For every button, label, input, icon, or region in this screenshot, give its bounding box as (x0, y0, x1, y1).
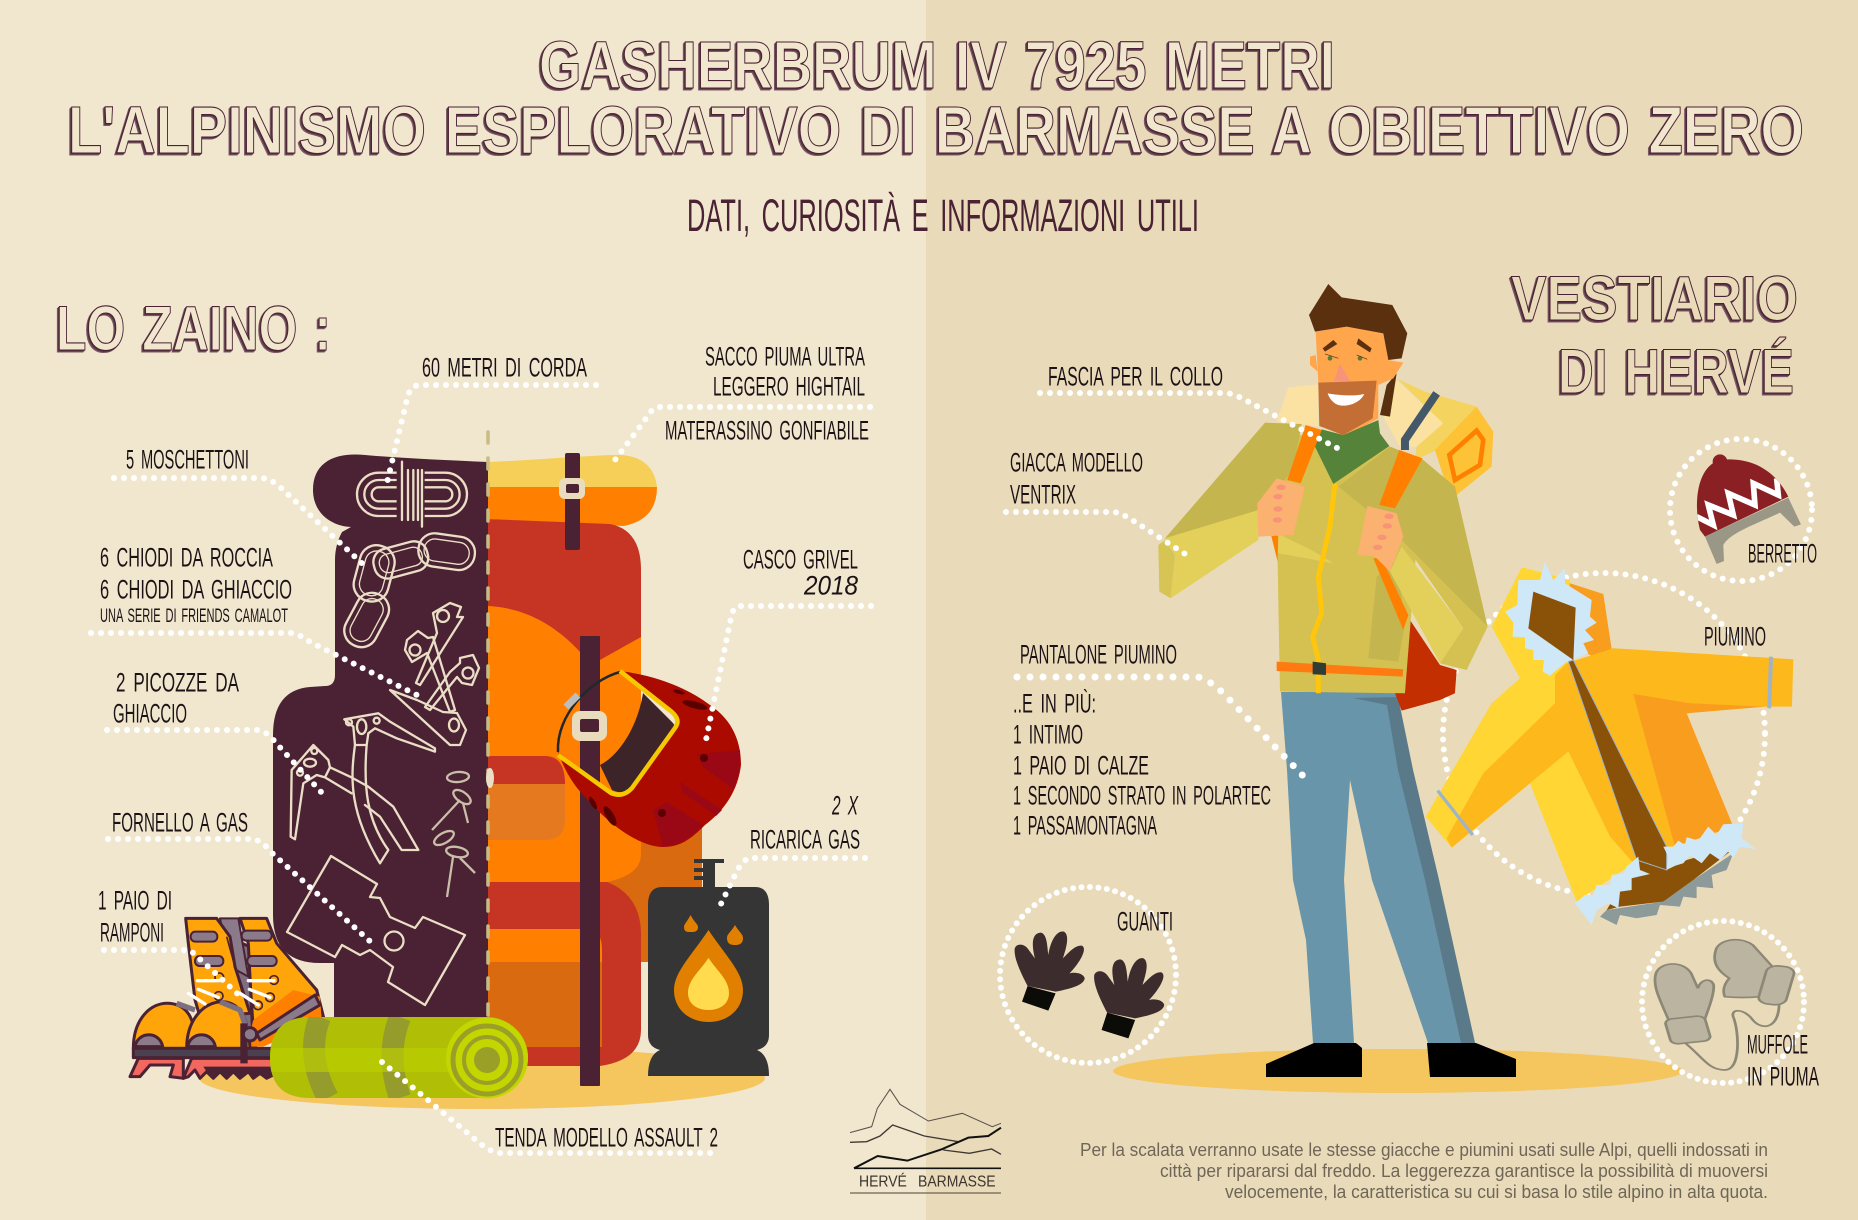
logo: hervé barmasse: HERVÉ BARMASSE (859, 1174, 996, 1191)
label: piumino: PIUMINO (1704, 622, 1766, 652)
callout: sacco piuma (615, 342, 870, 460)
waist belt (1277, 662, 1403, 677)
callout: moschettoni: 5 MOSCHETTONI (126, 444, 249, 474)
ground shadow left (199, 1047, 765, 1109)
heading: vestiario di hervé (1511, 264, 1798, 407)
icon: rope (357, 462, 467, 527)
callout: fornello (108, 808, 373, 944)
callout: chiodi: 6 CHIODI DA GHIACCIO (100, 574, 292, 604)
text block: footnote: città per ripararsi dal freddo. La leggerezza garantisce la possibilità di muoversi (1160, 1161, 1768, 1181)
callout: giacca (1006, 448, 1190, 557)
title: GASHERBRUM IV 7925 METRI (539, 28, 1335, 103)
icon: gloves (1015, 932, 1164, 1038)
head (1309, 284, 1407, 436)
callout: tenda: TENDA MODELLO ASSAULT 2 (495, 1122, 718, 1152)
callout: ramponi (98, 886, 240, 996)
stitching (486, 432, 490, 1017)
icon: ice screws (432, 771, 475, 897)
callout: chiodi: UNA SERIE DI FRIENDS CAMALOT (100, 606, 288, 627)
boot toe caps (133, 1002, 250, 1048)
callout: tenda (382, 1062, 718, 1153)
icon: mittens (1655, 940, 1796, 1070)
callout: picozze: 2 PICOZZE DA (116, 668, 239, 698)
icon: rock pitons (390, 603, 479, 745)
ground shadow right (1113, 1049, 1683, 1093)
text block: e in più: 1 PASSAMONTAGNA (1013, 810, 1157, 840)
figure: hervé (1158, 284, 1516, 1077)
label: materassino: MATERASSINO GONFIABILE (665, 416, 869, 446)
shoes (1266, 1043, 1516, 1077)
hands (1257, 478, 1403, 572)
text block: e in più (1013, 688, 1271, 840)
callout: ramponi: RAMPONI (100, 918, 164, 948)
text block: footnote: Per la scalata verranno usate le stesse giacche e piumini usati sulle Alpi, quelli indossati in (1080, 1140, 1768, 1160)
dotted circle: muffole (1642, 921, 1804, 1083)
callout: ricarica gas (719, 790, 865, 908)
callout: casco: 2018 (803, 570, 858, 600)
callout: 60 metri di corda: 60 METRI DI CORDA (422, 352, 587, 382)
text block: e in più: 1 SECONDO STRATO IN POLARTEC (1013, 780, 1271, 810)
heading: lo zaino: LO ZAINO : (56, 294, 331, 364)
panel: vestiario illustration (1000, 284, 1812, 1093)
callout: 60 metri di corda (386, 352, 596, 487)
dotted circle: berretto (1670, 439, 1812, 581)
callout: sacco piuma: SACCO PIUMA ULTRA (705, 342, 865, 372)
heading: vestiario di hervé: VESTIARIO (1511, 264, 1798, 334)
dotted circle: guanti (1000, 887, 1176, 1063)
heading: vestiario di hervé: DI HERVÉ (1558, 337, 1794, 407)
neck scarf (1315, 420, 1389, 484)
backpack right half (488, 455, 702, 1066)
gas canister (648, 859, 769, 1076)
callout: moschettoni (114, 444, 367, 568)
crampon boots (130, 918, 323, 1078)
crampon spikes (130, 1048, 277, 1078)
main strap buckle (572, 711, 607, 741)
text block: footnote: velocemente, la caratteristica su cui si basa lo stile alpino in alta quota. (1225, 1182, 1768, 1202)
title (68, 28, 1804, 168)
icon: ice axes (291, 713, 435, 863)
red backpack (1395, 615, 1457, 711)
top strap with buckle (559, 453, 585, 550)
text block: e in più: ..E IN PIÙ: (1013, 688, 1096, 718)
dotted circle: piumino (1443, 573, 1765, 895)
label: guanti: GUANTI (1117, 906, 1173, 936)
callout: fascia: FASCIA PER IL COLLO (1048, 362, 1223, 392)
callout: giacca: VENTRIX (1010, 480, 1076, 510)
text block: e in più: 1 PAIO DI CALZE (1013, 750, 1149, 780)
callout: giacca: GIACCA MODELLO (1010, 448, 1143, 478)
icon: gas stove (287, 856, 465, 1005)
jacket (1158, 423, 1488, 693)
label: muffole in piuma (1747, 1030, 1819, 1092)
callout: ramponi: 1 PAIO DI (98, 886, 172, 916)
text block: footnote (1080, 1140, 1768, 1202)
callout: sacco piuma: LEGGERO HIGHTAIL (713, 372, 865, 402)
main strap (580, 636, 600, 1086)
panel: backpack illustration (130, 432, 769, 1109)
icon: carabiners (339, 531, 477, 653)
text block: e in più: 1 INTIMO (1013, 720, 1083, 750)
icon: down jacket (1426, 562, 1793, 925)
helmet (558, 671, 741, 847)
callout: pantalone (1017, 640, 1309, 782)
icon: beanie (1697, 454, 1801, 564)
rolled pack on shoulders (1277, 378, 1493, 495)
subtitle: DATI, CURIOSITÀ E INFORMAZIONI UTILI (687, 190, 1199, 241)
callout: chiodi (91, 542, 421, 697)
shoulder straps (1270, 425, 1423, 630)
callout: chiodi: 6 CHIODI DA ROCCIA (100, 542, 273, 572)
callout: casco (706, 544, 871, 740)
callout: picozze (107, 668, 322, 793)
callout: ricarica gas: 2 X (831, 790, 859, 820)
callout: ricarica gas: RICARICA GAS (750, 824, 860, 854)
callout: fascia (1040, 362, 1339, 449)
callout: casco: CASCO GRIVEL (743, 544, 858, 574)
sleeping mat (270, 1017, 530, 1098)
backpack left half (273, 454, 488, 1020)
callout: pantalone: PANTALONE PIUMINO (1020, 640, 1177, 670)
logo: hervé barmasse (850, 1089, 1001, 1193)
callout: picozze: GHIACCIO (113, 698, 187, 728)
trousers (1281, 692, 1475, 1043)
callout: fornello: FORNELLO A GAS (112, 808, 248, 838)
